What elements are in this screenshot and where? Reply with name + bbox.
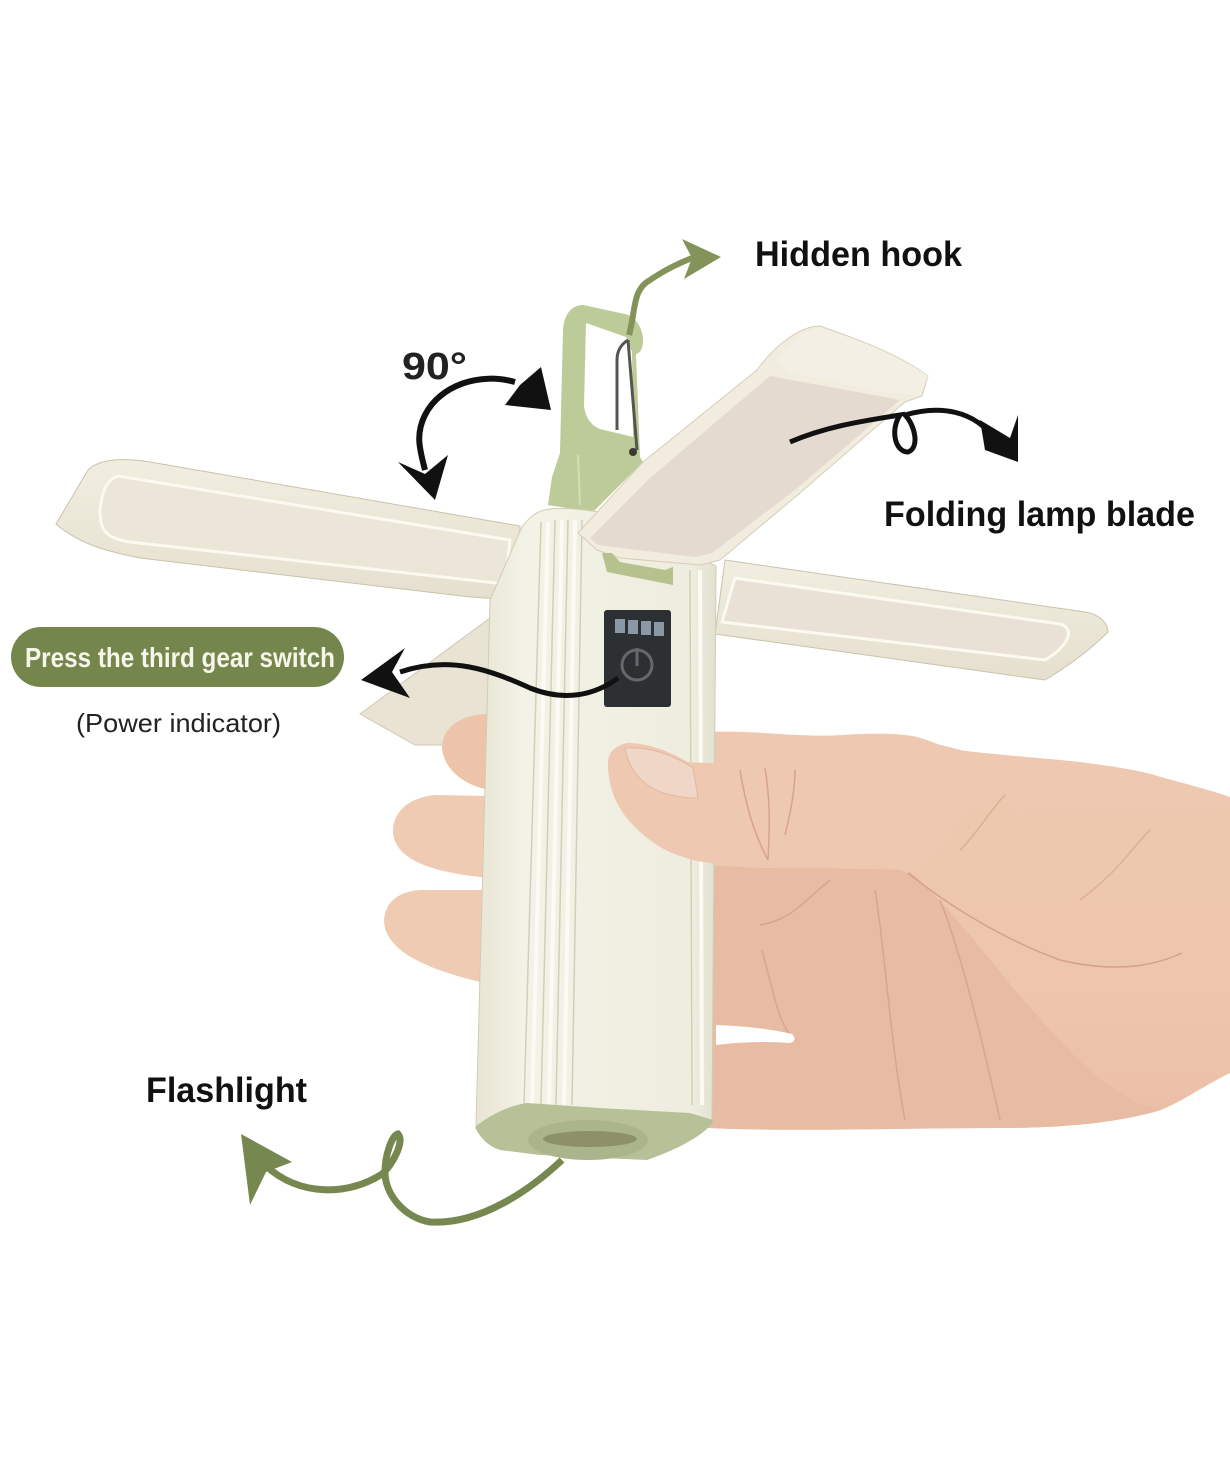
blade: upper right (578, 326, 928, 585)
power indicator panel (604, 610, 671, 707)
blade: right (715, 560, 1108, 680)
switch pill (11, 627, 344, 687)
hand: fingers behind the lamp (384, 714, 490, 982)
switch pill: Press the third gear switch (25, 642, 335, 673)
flashlight end cap (475, 1103, 713, 1160)
flashlight arrow (241, 1134, 562, 1222)
thumb (608, 743, 1000, 873)
lamp body (476, 508, 716, 1125)
hook arrow (629, 239, 721, 335)
blade: left (56, 460, 520, 600)
hand: palm (708, 732, 1230, 1130)
finger gap (716, 1025, 794, 1045)
label: Folding lamp blade: Folding lamp blade (884, 495, 1195, 534)
folding blade arrow (790, 410, 1018, 462)
label: 90 degrees: 90° (402, 346, 467, 388)
90 degree arrow (398, 367, 551, 500)
label: power indicator: (Power indicator) (76, 708, 281, 738)
blade: lower left behind body (360, 618, 500, 745)
hand: palm shading (708, 866, 1161, 1130)
carabiner hook (548, 305, 643, 512)
switch arrow (361, 648, 618, 698)
label: Hidden hook: Hidden hook (755, 235, 963, 274)
label: Flashlight: Flashlight (146, 1071, 307, 1110)
